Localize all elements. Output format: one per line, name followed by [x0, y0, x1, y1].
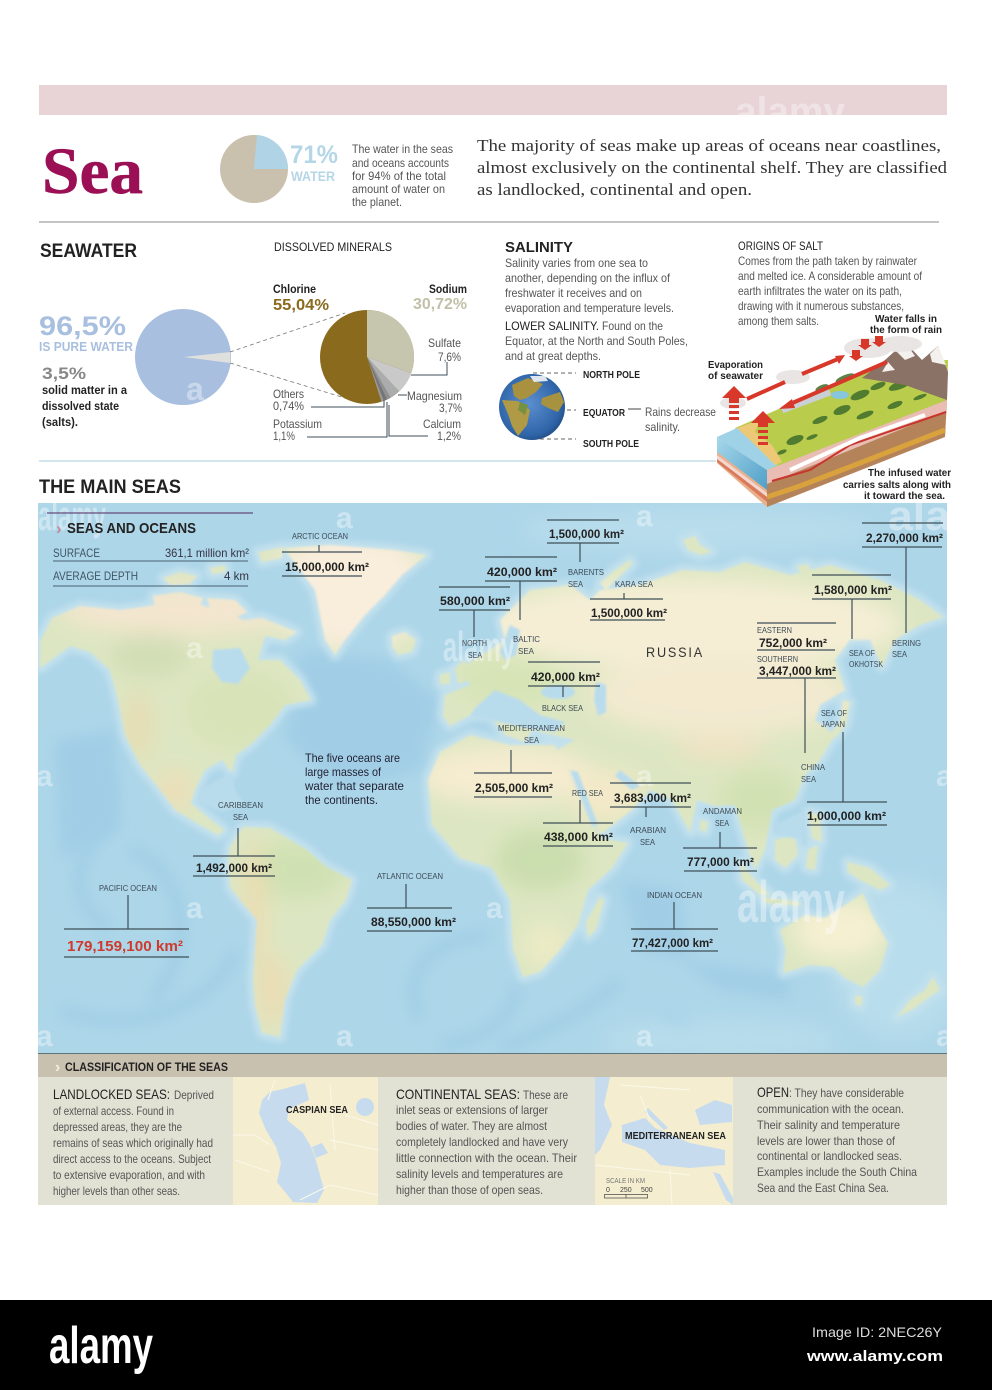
water percentage: WATER [291, 169, 335, 184]
header [42, 135, 948, 209]
footer bar: alamy [49, 1317, 153, 1375]
water share text [352, 142, 453, 209]
scale bar: SCALE IN KM [606, 1178, 645, 1185]
intro paragraph: almost exclusively on the continental shelf. They are classified [477, 158, 948, 177]
callout: Baltic Sea: BALTIC [513, 634, 540, 644]
scale bar [604, 1178, 653, 1198]
block: right cut face [767, 400, 947, 507]
heading band: › [55, 1059, 60, 1076]
origins text: Comes from the path taken by rainwater [738, 254, 917, 268]
diagram labels: of seawater [708, 370, 763, 382]
panel: world map: a [936, 1020, 953, 1053]
panel: world map: a [336, 1020, 353, 1053]
panel: classification of the seas [38, 1053, 947, 1205]
mineral labels: Calcium [423, 417, 461, 431]
watermarks: alamy [38, 492, 106, 539]
text: continental seas: little connection with the ocean. Their [396, 1151, 577, 1165]
callout: Kara Sea: KARA SEA [615, 579, 653, 589]
panel: salinity [499, 239, 716, 450]
text: landlocked seas: to extensive evaporation, and with [53, 1168, 205, 1182]
callout: Red Sea: RED SEA [572, 788, 603, 798]
callout: Black Sea: BLACK SEA [542, 703, 583, 713]
water share text: The water in the seas [352, 142, 453, 156]
scale bar: 250 [620, 1187, 632, 1194]
water share text: and oceans accounts [352, 156, 449, 170]
callout: North Sea: NORTH [462, 638, 487, 648]
intro paragraph: as landlocked, continental and open. [477, 180, 752, 199]
map: Mediterranean Sea [595, 1077, 733, 1205]
panel: world map: a [336, 502, 353, 535]
pie chart: dissolved minerals [320, 310, 414, 404]
text: open seas: Sea and the East China Sea. [757, 1181, 889, 1195]
diagram labels: Evaporation [708, 359, 763, 371]
footer bar: Image ID: 2NEC26Y [812, 1324, 943, 1340]
text: open seas: levels are lower than those of [757, 1134, 896, 1148]
panel: world map: a [36, 760, 53, 793]
diagram labels: the form of rain [870, 324, 942, 336]
callout: Caribbean Sea: SEA [233, 812, 248, 822]
pure water figures [39, 311, 134, 429]
callout: Barents Sea: SEA [568, 579, 583, 589]
callout: Sea of Okhotsk [812, 575, 892, 669]
text: landlocked seas [53, 1086, 214, 1198]
callout: Caribbean Sea [193, 800, 275, 876]
panel: world map [36, 492, 970, 1060]
panel: world map: a [486, 892, 503, 925]
heading band: CLASSIFICATION OF THE SEAS [65, 1062, 228, 1074]
lower salinity text: and at great depths. [505, 349, 601, 363]
origins text: among them salts. [738, 314, 819, 328]
pure water figures: 96,5% [39, 311, 126, 341]
origins text: earth infiltrates the water on its path, [738, 284, 902, 298]
text: landlocked seas: direct access to the oceans. Subject [53, 1152, 212, 1166]
callout: Black Sea [528, 662, 600, 713]
panel: world map: a [636, 760, 653, 793]
globe labels [533, 370, 716, 450]
text: continental seas: completely landlocked and have very [396, 1135, 568, 1149]
legend: seas and oceans: SEAS AND OCEANS [67, 520, 196, 537]
region label: Russia: RUSSIA [646, 644, 704, 660]
text: alamy [735, 90, 846, 134]
text: open seas: continental or landlocked seas. [757, 1149, 902, 1163]
mineral labels: Sulfate [428, 336, 461, 350]
mineral labels: Magnesium [407, 389, 462, 403]
panel: world map: a [636, 1020, 653, 1053]
callout: Andaman Sea [683, 806, 757, 871]
callout: Arctic Ocean [282, 531, 369, 576]
text: open seas: Their salinity and temperature [757, 1118, 900, 1132]
mineral labels: 3,7% [439, 401, 462, 415]
callout: Caribbean Sea: 1,492,000 km² [196, 861, 272, 875]
mineral labels: Potassium [273, 417, 322, 431]
illustration: water cycle block diagram [717, 336, 948, 507]
callout: Sea of Japan: 1,000,000 km² [807, 809, 886, 823]
callout: Sea of Okhotsk: SEA OF [849, 648, 875, 658]
heading band [38, 1053, 947, 1077]
text: open seas: Examples include the South China [757, 1165, 917, 1179]
text: continental seas [396, 1086, 577, 1197]
text: continental seas: bodies of water. They are almost [396, 1119, 548, 1133]
mineral labels: 1,2% [437, 429, 461, 443]
callout: Indian Ocean: 77,427,000 km² [632, 936, 713, 950]
water percentage [290, 141, 338, 184]
callout: Barents Sea: BARENTS [568, 567, 604, 577]
callout: Barents Sea: 1,500,000 km² [549, 527, 624, 541]
heading: the main seas: THE MAIN SEAS [39, 477, 181, 498]
panel: seawater [39, 240, 467, 443]
mineral labels: 30,72% [413, 296, 467, 313]
text: continental seas: salinity levels and temperatures are [396, 1167, 563, 1181]
pure water figures: dissolved state [42, 401, 119, 413]
map: inland seas [198, 625, 805, 840]
mineral labels: Chlorine [273, 282, 316, 296]
note: five oceans [305, 754, 404, 804]
pie chart: pure water vs solids [135, 309, 345, 407]
callout: North Sea: SEA [468, 650, 482, 660]
origins text: drawing with it numerous substances, [738, 299, 904, 313]
callout: Kara Sea: 1,500,000 km² [591, 606, 667, 620]
legend: seas and oceans: 361,1 million km² [165, 546, 249, 560]
panel: world map: alamy [737, 870, 845, 935]
callout: Bering Sea: SEA [892, 649, 907, 659]
callout: Atlantic Ocean: ATLANTIC OCEAN [377, 871, 443, 881]
header band [39, 85, 947, 115]
mountains [862, 342, 948, 400]
heading: salinity: SALINITY [505, 239, 573, 256]
callout: Baltic Sea: SEA [518, 646, 534, 656]
salinity text: freshwater it receives and on [505, 286, 642, 300]
callout: Andaman Sea: 777,000 km² [687, 855, 754, 869]
panel: world map: a [36, 1020, 53, 1053]
panel: world map: a [936, 760, 953, 793]
callout: Arabian Sea [610, 783, 691, 847]
map: Mediterranean Sea: MEDITERRANEAN SEA [625, 1131, 726, 1142]
scale bar: 0 [606, 1187, 610, 1194]
callout: North Sea: 580,000 km² [440, 594, 510, 608]
intro paragraph [477, 136, 948, 199]
callout: Andaman Sea: SEA [715, 818, 729, 828]
globe labels: EQUATOR [583, 408, 626, 419]
legend: seas and oceans: 4 km [224, 569, 249, 583]
text: continental seas: higher than those of open seas. [396, 1183, 543, 1197]
mineral labels: Others [273, 387, 304, 401]
title: Sea [42, 135, 143, 208]
lower salinity text: LOWER SALINITY. [505, 319, 599, 333]
callout: Sea of Japan: SEA OF [821, 708, 847, 718]
callout: Bering Sea: BERING [892, 638, 921, 648]
callout: Red Sea: 438,000 km² [544, 830, 613, 844]
water share text: for 94% of the total [352, 169, 446, 183]
diagram labels [708, 313, 951, 502]
legend: seas and oceans [47, 513, 253, 586]
callout: Atlantic Ocean [367, 871, 456, 931]
callout: Pacific Ocean: 179,159,100 km² [67, 938, 183, 955]
legend: seas and oceans: AVERAGE DEPTH [53, 569, 138, 583]
callout: China Sea: EASTERN [757, 625, 792, 635]
water share text: amount of water on [352, 182, 445, 196]
callout: Atlantic Ocean: 88,550,000 km² [371, 915, 456, 929]
callout: Baltic Sea: 420,000 km² [487, 565, 557, 579]
callout: Arabian Sea: ARABIAN [630, 825, 666, 835]
text: open seas [757, 1084, 917, 1195]
note: five oceans: The five oceans are [305, 751, 400, 765]
callout: Mediterranean Sea: MEDITERRANEAN [498, 723, 565, 733]
callout: China Sea: SOUTHERN [757, 654, 798, 664]
text: landlocked seas: LANDLOCKED SEAS: [53, 1086, 170, 1102]
panel: world map: a [636, 500, 653, 533]
text: continental seas: These are [523, 1088, 568, 1102]
callout: Sea of Okhotsk: 1,580,000 km² [814, 583, 892, 597]
pure water figures: 3,5% [42, 364, 86, 383]
salinity text [505, 256, 674, 315]
diagram labels: carries salts along with [843, 479, 951, 491]
heading: origins of salt: ORIGINS OF SALT [738, 241, 823, 253]
callout: Arctic Ocean: 15,000,000 km² [285, 560, 369, 574]
callout: Bering Sea [862, 523, 943, 659]
panel: world map: ala [888, 492, 951, 539]
intro paragraph: The majority of seas make up areas of oceans near coastlines, [477, 136, 941, 155]
callout: Arabian Sea: 3,683,000 km² [614, 791, 691, 805]
globe labels: NORTH POLE [583, 370, 640, 381]
diagram labels: The infused water [868, 467, 951, 479]
text: landlocked seas: of external access. Found in [53, 1104, 174, 1118]
callout: Kara Sea [590, 579, 667, 620]
callout: China Sea: CHINA [801, 762, 825, 772]
pure water figures: IS PURE WATER [39, 339, 134, 354]
salinity text: Salinity varies from one sea to [505, 256, 648, 270]
callout: China Sea: 752,000 km² [759, 636, 827, 650]
scale bar: 500 [641, 1187, 653, 1194]
globe labels: salinity. [645, 420, 680, 434]
text: landlocked seas: Deprived [174, 1088, 214, 1102]
globe labels: Rains decrease [645, 405, 716, 419]
diagram labels: Water falls in [875, 313, 937, 325]
callout: Mediterranean Sea [474, 723, 565, 797]
callout: Bering Sea: 2,270,000 km² [866, 531, 943, 545]
text: continental seas: CONTINENTAL SEAS: [396, 1086, 520, 1102]
lower salinity text: Equator, at the North and South Poles, [505, 334, 688, 348]
panel: world map: a [186, 632, 203, 665]
text: open seas: : They have considerable [789, 1086, 904, 1100]
globe labels: SOUTH POLE [583, 439, 639, 450]
text: open seas: communication with the ocean. [757, 1102, 904, 1116]
pie chart: pure water vs solids: a [186, 371, 204, 407]
text: landlocked seas: higher levels than other seas. [53, 1184, 180, 1198]
footer bar [0, 1300, 992, 1390]
callout: Sea of Okhotsk: OKHOTSK [849, 659, 883, 669]
text: landlocked seas: depressed areas, they are the [53, 1120, 182, 1134]
callout: Barents Sea [547, 520, 624, 589]
panel: world map: alamy [443, 623, 515, 670]
text: landlocked seas: remains of seas which originally had [53, 1136, 213, 1150]
mineral labels: Sodium [429, 282, 467, 296]
origins text: and melted ice. A considerable amount of [738, 269, 923, 283]
note: five oceans: the continents. [305, 793, 378, 807]
arrows: water cycle [722, 336, 887, 445]
legend: seas and oceans: SURFACE [53, 546, 100, 560]
origins text [738, 254, 923, 328]
block: sea cut face [717, 437, 767, 507]
diagram labels: it toward the sea. [864, 490, 945, 502]
callout: Sea of Japan [807, 708, 887, 825]
callout: Red Sea [543, 788, 613, 846]
callout: Indian Ocean [631, 890, 718, 951]
mineral labels: 7,6% [438, 350, 461, 364]
map: continental shelves [40, 536, 943, 1037]
globe illustration [499, 374, 565, 440]
pure water figures: solid matter in a [42, 385, 128, 397]
map: Caspian Sea [233, 1077, 378, 1205]
callout: Mediterranean Sea: 2,505,000 km² [475, 781, 553, 795]
callout: Arctic Ocean: ARCTIC OCEAN [292, 531, 348, 541]
callout: Indian Ocean: INDIAN OCEAN [647, 890, 702, 900]
callout: Sea of Japan: JAPAN [821, 719, 845, 729]
callout: Caribbean Sea: CARIBBEAN [218, 800, 263, 810]
mineral labels: 1,1% [273, 429, 295, 443]
callout: Mediterranean Sea: SEA [524, 735, 539, 745]
callout: China Sea: SEA [801, 774, 816, 784]
lower salinity text: Found on the [602, 319, 663, 333]
callout: Black Sea: 420,000 km² [531, 670, 600, 684]
heading: seawater: SEAWATER [40, 241, 137, 262]
text: continental seas: inlet seas or extensions of larger [396, 1103, 548, 1117]
lower salinity text [505, 319, 688, 363]
map: continents [38, 503, 947, 1053]
callout: China Sea: 3,447,000 km² [759, 664, 836, 678]
mineral labels: 55,04% [273, 297, 329, 314]
callout: North Sea [439, 587, 510, 660]
mineral labels: 0,74% [273, 399, 304, 413]
map: oceans [38, 503, 970, 1060]
callout: Andaman Sea: ANDAMAN [703, 806, 742, 816]
note: five oceans: water that separate [304, 779, 404, 793]
mineral labels [273, 282, 467, 443]
footer bar: www.alamy.com [806, 1348, 943, 1365]
pure water figures: (salts). [42, 417, 78, 429]
panel: world map: a [186, 892, 203, 925]
water percentage: 71% [290, 141, 338, 169]
salinity text: another, depending on the influx of [505, 271, 671, 285]
callout: Pacific Ocean [64, 883, 189, 957]
note: five oceans: large masses of [305, 765, 382, 779]
heading: dissolved minerals: DISSOLVED MINERALS [274, 240, 392, 254]
callout: Pacific Ocean: PACIFIC OCEAN [99, 883, 157, 893]
block: land surface [717, 360, 948, 470]
callout: Arabian Sea: SEA [640, 837, 655, 847]
water share text: the planet. [352, 195, 402, 209]
clouds [720, 336, 922, 409]
callout: Baltic Sea [485, 557, 557, 656]
text: open seas: OPEN [757, 1084, 789, 1100]
salinity text: evaporation and temperature levels. [505, 301, 674, 315]
callout: China Sea [757, 623, 836, 784]
map: Caspian Sea: CASPIAN SEA [286, 1105, 348, 1116]
panel: origins of salt [708, 241, 951, 507]
pie chart: water share of the planet [220, 135, 288, 203]
legend: seas and oceans: › [56, 519, 62, 538]
